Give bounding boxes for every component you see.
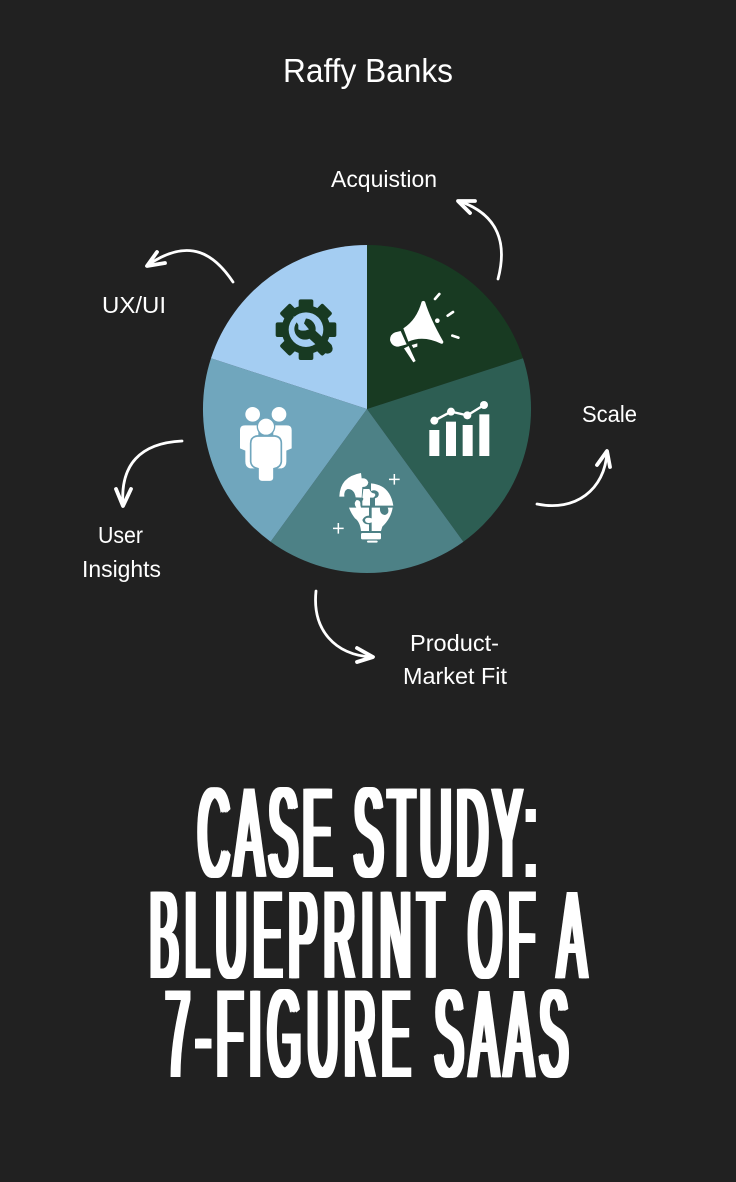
title: 7-FIGURE SAAS xyxy=(166,965,574,1104)
title: CASE STUDY: xyxy=(198,762,542,905)
icon: bar chart with trend line xyxy=(429,401,489,456)
arrow: to acquisition xyxy=(458,201,501,279)
label: product-market fit: Market Fit xyxy=(403,663,508,689)
arrow: to scale xyxy=(537,451,610,506)
arrow: to product-market fit xyxy=(316,591,373,662)
label: UX/UI: UX/UI xyxy=(102,292,166,318)
label: product-market fit: Product- xyxy=(410,630,499,656)
wedge: UX/UI xyxy=(211,245,367,409)
wedge: product-market fit xyxy=(271,409,463,573)
label: acquisition: Acquistion xyxy=(331,166,437,192)
label: product-market fit xyxy=(403,630,508,689)
icon: puzzle light bulb xyxy=(333,473,400,543)
label: user insights: User xyxy=(98,522,143,548)
wedge: scale xyxy=(367,358,531,542)
icon: megaphone xyxy=(390,294,458,362)
label: user insights xyxy=(82,522,161,582)
author name: Raffy Banks xyxy=(283,52,453,89)
icon: group of people xyxy=(240,407,292,482)
label: scale: Scale xyxy=(582,401,637,427)
wedge: acquisition xyxy=(367,245,523,409)
pie chart: five growth stages xyxy=(203,245,531,573)
icon: gear and wrench xyxy=(276,299,336,360)
title: BLUEPRINT OF A xyxy=(150,866,593,1005)
arrow: to user insights xyxy=(116,441,182,506)
title xyxy=(150,762,593,1104)
arrow: to UX/UI xyxy=(147,250,233,282)
label: user insights: Insights xyxy=(82,556,161,582)
wedge: user insights xyxy=(203,358,367,542)
